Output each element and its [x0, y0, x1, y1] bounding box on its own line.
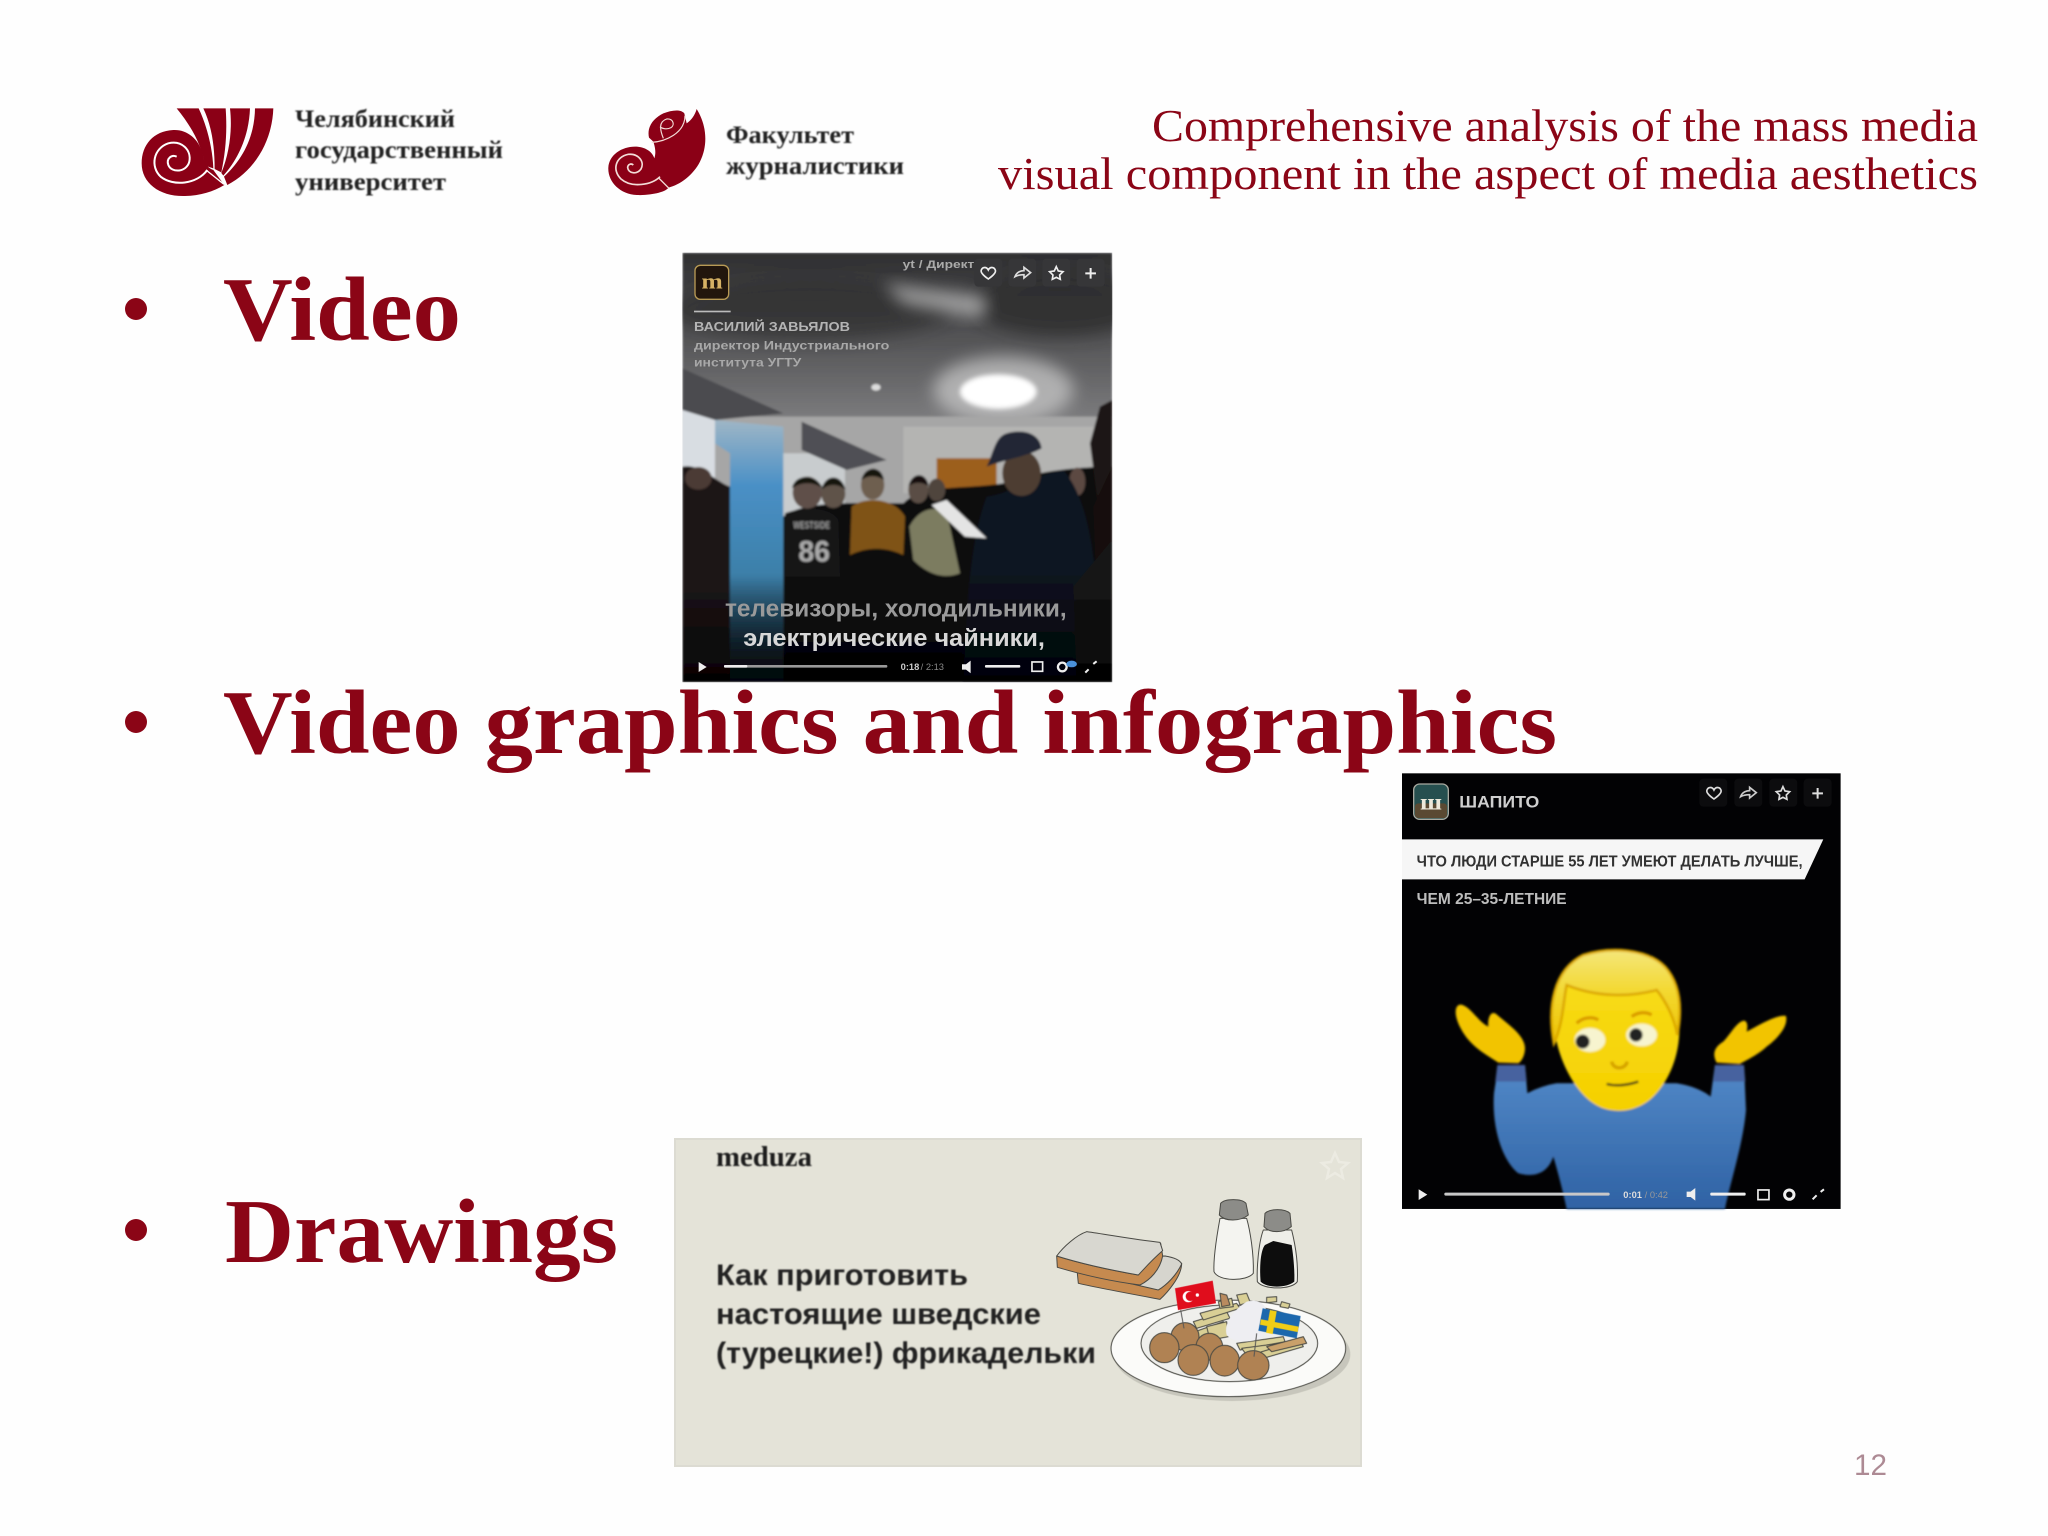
- lower third: speaker name: института УГТУ: [694, 356, 802, 370]
- source caption: yt / Директ: [903, 259, 974, 271]
- video subtitles: [726, 604, 1065, 651]
- channel logo and name: ш: [1420, 789, 1442, 815]
- icon: faculty scroll logo: [608, 109, 705, 195]
- bullet: Video graphics and infographics: Video graphics and infographics: [223, 672, 1557, 773]
- header: faculty logo and name: [608, 109, 904, 195]
- photo: Video example, man reading to students: [670, 253, 1147, 682]
- recipe headline: Как приготовить: [716, 1259, 968, 1292]
- heads: [793, 477, 822, 509]
- title: visual component in the aspect of media aesthetics: [998, 148, 1978, 199]
- faculty name: [726, 122, 904, 180]
- header: university logo and name: [142, 106, 503, 196]
- headline banner: ЧТО ЛЮДИ СТАРШЕ 55 ЛЕТ УМЕЮТ ДЕЛАТЬ ЛУЧШЕ,: [1417, 854, 1803, 871]
- channel logo and name: [1414, 784, 1539, 819]
- plate: [1114, 1308, 1350, 1401]
- university name: Челябинский: [295, 106, 455, 133]
- crowd: [682, 466, 730, 682]
- photo: Video example, man reading to students: WESTSIDE: [793, 520, 830, 531]
- university name: государственный: [295, 137, 503, 164]
- icon: shrugging man emoji: [1456, 950, 1786, 1209]
- fries: [1193, 1293, 1307, 1358]
- faculty name: журналистики: [726, 153, 904, 180]
- bullet: Video: [125, 259, 461, 360]
- bread: [1057, 1232, 1182, 1299]
- speaker: [963, 470, 1100, 682]
- icon: favourite star: [1322, 1153, 1348, 1178]
- headline banner: [1402, 839, 1823, 908]
- video player controls: / 2:13: [921, 662, 944, 672]
- player action buttons: [974, 264, 1099, 286]
- recipe headline: (турецкие!) фрикадельки: [716, 1337, 1096, 1370]
- meatballs: [1150, 1323, 1269, 1380]
- title: Comprehensive analysis of the mass media: [1152, 100, 1978, 151]
- photo: Video example, man reading to students: 86: [798, 536, 830, 569]
- video player controls: [699, 661, 1097, 673]
- video player controls: 0:18: [901, 662, 919, 672]
- player action buttons: [1699, 779, 1832, 807]
- video player controls: 0:01: [1623, 1190, 1642, 1200]
- faculty name: Факультет: [726, 122, 854, 149]
- lower third: speaker name: ВАСИЛИЙ ЗАВЬЯЛОВ: [694, 319, 850, 334]
- logo badge: m: [701, 268, 723, 293]
- channel logo and name: ШАПИТО: [1459, 792, 1539, 811]
- university name: университет: [295, 169, 446, 196]
- salt and pepper shakers: [1214, 1200, 1297, 1288]
- video player controls: [1419, 1188, 1824, 1201]
- recipe headline: настоящие шведские: [716, 1298, 1041, 1331]
- lower third: speaker name: [694, 311, 889, 370]
- bullet: Video: Video: [223, 259, 461, 360]
- headline banner: ЧЕМ 25–35-ЛЕТНИЕ: [1417, 891, 1567, 908]
- lower third: speaker name: директор Индустриального: [694, 338, 889, 352]
- page number: 12: [1854, 1449, 1887, 1482]
- panel: Drawings example, Meduza recipe card: [675, 1139, 1361, 1466]
- logo badge: [695, 265, 729, 299]
- video player controls: / 0:42: [1645, 1190, 1668, 1200]
- photo: Video graphics example, shrug emoji: [1402, 773, 1841, 1209]
- title: [998, 100, 1978, 199]
- flags: [1175, 1281, 1301, 1357]
- bullet: Drawings: Drawings: [225, 1181, 618, 1282]
- illustration: plate with meatballs, bread, salt and pepper: [1057, 1200, 1350, 1401]
- university name: [295, 106, 503, 196]
- video subtitles: электрические чайники,: [743, 625, 1045, 652]
- recipe headline: [716, 1259, 1096, 1370]
- Meduza wordmark: meduza: [716, 1142, 812, 1173]
- icon: university snail logo: [142, 108, 273, 196]
- video subtitles: телевизоры, холодильники,: [725, 596, 1067, 623]
